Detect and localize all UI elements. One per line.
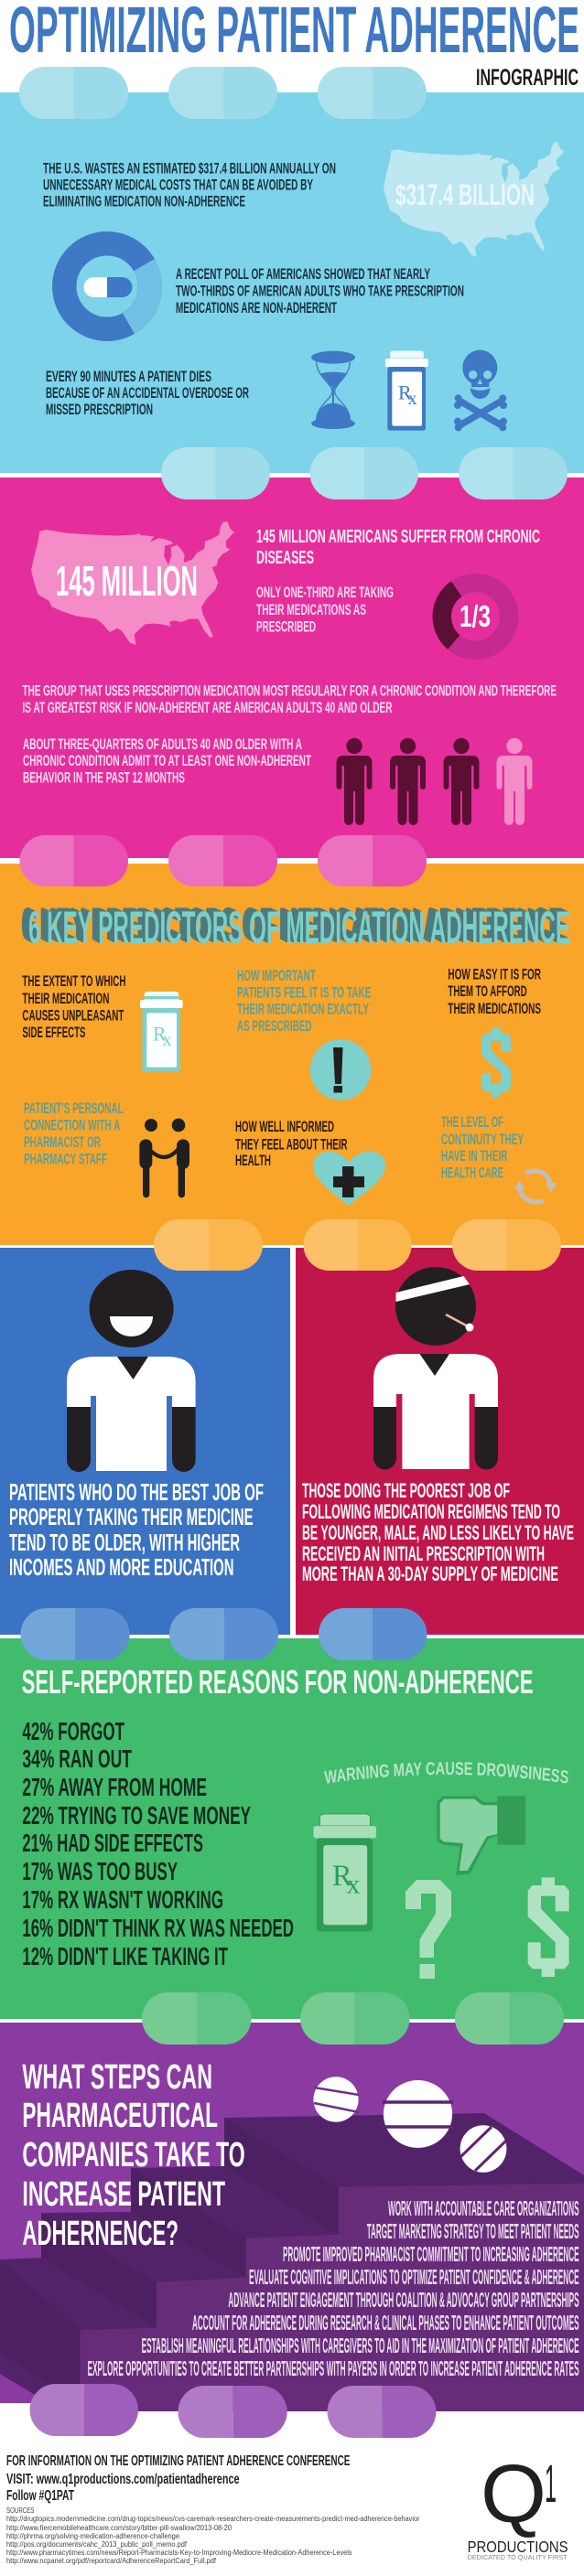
list: reasons: 27% AWAY FROM HOME — [22, 1773, 207, 1801]
panel: chronic disease — [0, 478, 584, 858]
icon: prescription bottle — [385, 350, 428, 431]
icon: question mark — [406, 1880, 451, 1979]
logo: Q1 Productions: PRODUCTIONS — [468, 2538, 568, 2556]
text: three-quarters: ABOUT THREE-QUARTERS OF ADULTS 40 AND OLDER WITH A — [23, 736, 302, 753]
text: three-quarters — [23, 736, 311, 787]
icon: striped tablet diagonal — [460, 2125, 506, 2173]
list: reasons: 17% RX WASN'T WORKING — [22, 1885, 223, 1914]
heading: what steps: ADHERNENCE? — [22, 2215, 178, 2253]
text: best patients — [9, 1478, 264, 1581]
footer: conference information: Follow #Q1PAT — [6, 2488, 74, 2504]
text: wasted billions: ELIMINATING MEDICATION NON-ADHERENCE — [43, 194, 245, 210]
logo: Q1 Productions: Q — [481, 2449, 546, 2540]
map: 145 million: 145 MILLION — [56, 557, 198, 605]
text: importance: AS PRESCRIBED — [237, 1018, 312, 1035]
text: importance: PATIENTS FEEL IT IS TO TAKE — [237, 984, 372, 1001]
text: pharmacist connection: PHARMACIST OR — [24, 1134, 101, 1151]
text: every 90 minutes: EVERY 90 MINUTES A PATIENT DIES — [46, 369, 211, 385]
panel: best adherers — [0, 1248, 290, 1635]
text: importance: THEIR MEDICATION EXACTLY — [237, 1001, 369, 1017]
icon: heart with cross — [313, 1152, 385, 1206]
text: best patients: PATIENTS WHO DO THE BEST JOB OF — [9, 1478, 264, 1506]
text: importance: HOW IMPORTANT — [237, 968, 316, 984]
footer: conference information: VISIT: www.q1productions.com/patientadherence — [6, 2472, 240, 2487]
icon: teal prescription bottle — [140, 992, 183, 1072]
heading: 145 million americans — [256, 526, 540, 568]
text: three-quarters: CHRONIC CONDITION ADMIT TO AT LEAST ONE NON-ADHERENT — [23, 753, 311, 769]
pills: pink section bottom — [20, 835, 427, 886]
heading: what steps: COMPANIES TAKE TO — [22, 2136, 245, 2174]
pills: green section bottom — [142, 1992, 564, 2045]
text: group at risk — [22, 682, 557, 716]
heading: what steps — [22, 2058, 245, 2253]
icon: green prescription bottle: R — [332, 1859, 352, 1892]
text: poorest patients — [302, 1479, 574, 1585]
text: poll result — [176, 266, 464, 317]
list: steps — [88, 2196, 579, 2380]
text: well informed — [235, 1119, 348, 1169]
map: 145 million — [31, 521, 234, 645]
text: wasted billions: UNNECESSARY MEDICAL COSTS THAT CAN BE AVOIDED BY — [43, 177, 313, 194]
text: every 90 minutes — [46, 369, 249, 418]
pills: blue panels bottom — [20, 1608, 427, 1660]
footer: sources: http://phrma.org/solving-medication-adherence-challenge — [6, 2532, 180, 2540]
text: one-third: THEIR MEDICATIONS AS — [256, 602, 366, 618]
text: one-third: PRESCRIBED — [256, 618, 316, 635]
footer: conference information — [6, 2453, 351, 2504]
text: wasted billions: THE U.S. WASTES AN ESTIMATED $317.4 BILLION ANNUALLY ON — [43, 161, 336, 177]
icon: striped tablet small — [313, 2077, 359, 2122]
text: every 90 minutes: BECAUSE OF AN ACCIDENTAL OVERDOSE OR — [46, 385, 249, 402]
text: side effects: THE EXTENT TO WHICH — [22, 973, 125, 990]
text: well informed: THEY FEEL ABOUT THEIR — [235, 1136, 348, 1153]
logo: Q1 Productions: 1 — [545, 2454, 557, 2514]
heading: what steps: WHAT STEPS CAN — [22, 2058, 212, 2097]
staircase — [0, 2113, 584, 2411]
icon: three of four people — [337, 738, 533, 825]
footer: sources: SOURCES — [6, 2506, 34, 2515]
icon: prescription bottle: R — [398, 381, 412, 403]
text: continuity: THE LEVEL OF — [441, 1114, 503, 1131]
icon: prescription bottle: x — [408, 389, 417, 409]
chart: two-thirds donut with pill — [64, 243, 150, 329]
chart: one-third donut — [442, 583, 509, 650]
list: reasons: 21% HAD SIDE EFFECTS — [22, 1829, 203, 1857]
footer: sources: http://www.fiercemobilehealthcare.com/story/bitter-pill-swallow/2013-08-20 — [6, 2524, 233, 2532]
text: side effects: SIDE EFFECTS — [22, 1025, 85, 1041]
text: continuity: HEALTH CARE — [441, 1165, 503, 1182]
icon: skull and crossbones — [454, 350, 507, 431]
text: well informed: HOW WELL INFORMED — [235, 1119, 334, 1135]
text: one-third: ONLY ONE-THIRD ARE TAKING — [256, 585, 394, 601]
text: continuity: CONTINUITY THEY — [441, 1132, 524, 1148]
footer: sources: http://www.pharmacytimes.com/news/Report-Pharmacists-Key-to-Improving-Mediocre-Medication-Adherence-Levels — [6, 2549, 351, 2557]
text: side effects: THEIR MEDICATION — [22, 991, 109, 1007]
text: continuity — [441, 1114, 524, 1182]
icon: teal prescription bottle: x — [163, 1030, 172, 1050]
heading: what steps: INCREASE PATIENT — [22, 2175, 225, 2214]
list: reasons: 16% DIDN'T THINK RX WAS NEEDED — [22, 1914, 294, 1942]
text: pharmacist connection: PHARMACY STAFF — [24, 1151, 107, 1167]
icon: dollar sign — [528, 1877, 569, 1977]
pills: blue section bottom — [161, 447, 568, 499]
icon: hourglass — [311, 351, 355, 429]
text: one-third — [256, 585, 394, 635]
figure: smiling patient — [67, 1270, 196, 1472]
list: reasons: 42% FORGOT — [22, 1717, 124, 1745]
chart: one-third donut: 1/3 — [460, 599, 491, 633]
pills: orange section bottom — [154, 1219, 561, 1271]
text: best patients: INCOMES AND MORE EDUCATION — [9, 1553, 234, 1581]
pills: blue section top — [19, 67, 427, 119]
icon: dollar sign — [481, 1028, 511, 1097]
logo: Q1 Productions — [468, 2449, 568, 2561]
text: side effects: CAUSES UNPLEASANT — [22, 1008, 124, 1025]
figure: sick patient — [373, 1267, 498, 1470]
text: afford — [448, 966, 541, 1017]
panel: cost of non-adherence — [0, 92, 584, 473]
text: poll result: MEDICATIONS ARE NON-ADHERENT — [176, 300, 337, 317]
icon: teal prescription bottle: R — [153, 1022, 167, 1045]
panel: steps for pharmaceutical companies — [0, 2023, 584, 2411]
icon: green prescription bottle — [313, 1814, 376, 1932]
map: $317.4 billion — [384, 142, 564, 257]
panel: poorest adherers — [296, 1248, 584, 1635]
icon: exclamation mark — [310, 1039, 371, 1100]
panel: self-reported reasons — [0, 1638, 584, 2019]
pills: purple section bottom — [29, 2384, 436, 2438]
list: reasons — [22, 1717, 294, 1970]
list: reasons: 22% TRYING TO SAVE MONEY — [22, 1801, 251, 1830]
icon: striped tablet large — [383, 2080, 453, 2148]
icon: green prescription bottle: x — [347, 1870, 361, 1899]
heading: what steps: PHARMACEUTICAL — [22, 2097, 218, 2135]
text: afford: THEM TO AFFORD — [448, 983, 527, 1000]
text: well informed: HEALTH — [235, 1153, 271, 1169]
text: best patients: TEND TO BE OLDER, WITH HIGHER — [9, 1529, 240, 1556]
text: every 90 minutes: MISSED PRESCRIPTION — [46, 402, 153, 418]
text: three-quarters: BEHAVIOR IN THE PAST 12 MONTHS — [23, 770, 185, 787]
text: wasted billions — [43, 161, 336, 210]
icon: thumbs down — [437, 1796, 525, 1875]
text: pharmacist connection: PATIENT'S PERSONAL — [24, 1100, 124, 1117]
text: continuity: HAVE IN THEIR — [441, 1148, 508, 1165]
footer: sources: http://www.ncpanet.org/pdf/reportcard/AdherenceReportCard_Full.pdf — [6, 2557, 217, 2565]
list: reasons: 12% DIDN'T LIKE TAKING IT — [22, 1942, 228, 1970]
list: reasons: 34% RAN OUT — [22, 1744, 132, 1773]
logo: Q1 Productions: DEDICATED TO QUALITY FIRST — [468, 2553, 568, 2561]
footer: conference information: FOR INFORMATION ON THE OPTIMIZING PATIENT ADHERENCE CONFERENCE — [6, 2453, 351, 2469]
heading: 145 million americans: DISEASES — [256, 547, 314, 568]
icon: handshake — [145, 1119, 185, 1195]
text: best patients: PROPERLY TAKING THEIR MEDICINE — [9, 1503, 254, 1530]
panel: key predictors — [0, 864, 584, 1245]
footer: sources: http://pos.org/documents/cahc_2013_public_poll_memo.pdf — [6, 2540, 188, 2549]
text: side effects — [22, 973, 125, 1041]
icon: refresh arrows — [514, 1171, 557, 1202]
curved warning label: WARNING MAY CAUSE DROWSINESS — [324, 1762, 568, 1784]
text: pharmacist connection — [24, 1100, 124, 1167]
footer: sources: http://drugtopics.modernmedicine.com/drug-topics/news/cvs-caremark-researchers-create-measurements-predict-med-adherence-behavior — [6, 2515, 420, 2523]
footer: sources — [6, 2506, 420, 2565]
text: pharmacist connection: CONNECTION WITH A — [24, 1118, 120, 1134]
text: importance — [237, 968, 372, 1035]
list: reasons: 17% WAS TOO BUSY — [22, 1857, 178, 1885]
